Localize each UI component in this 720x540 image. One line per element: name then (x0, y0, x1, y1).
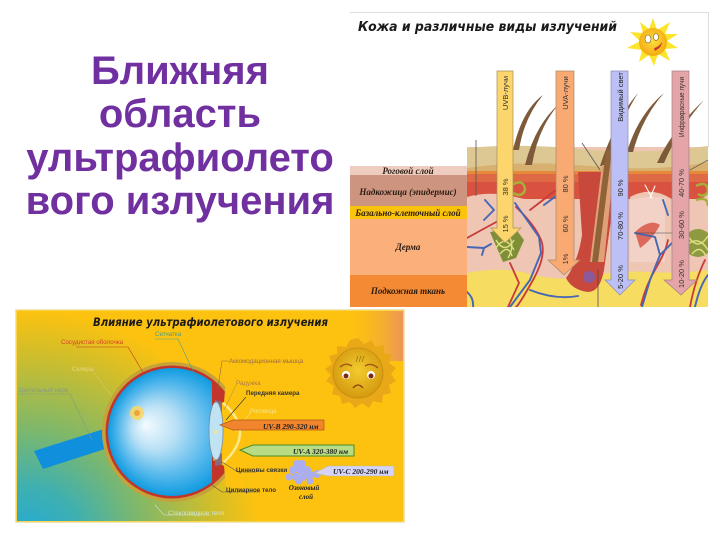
arrow: UVA rays: 1% (561, 253, 570, 264)
arrow: visible light: 70-80 % (616, 212, 625, 240)
macula spot (130, 406, 144, 420)
arrow: UV-A: UV-A 320-380 нм (293, 447, 348, 456)
eye part labels: Роговица (250, 408, 277, 415)
title: вого излучения (26, 179, 334, 223)
optic nerve (34, 428, 108, 469)
arrow: UV-B (220, 420, 324, 431)
layer: basal cells (350, 206, 467, 219)
arrow: UV-A (240, 445, 354, 456)
eye part labels: Зрительный нерв (18, 387, 69, 394)
eye part labels: Сосудистая оболочка (61, 339, 124, 346)
arrow: visible light: 90 % (616, 179, 625, 197)
arrow: UVB rays: 15 % (501, 215, 510, 233)
ozone molecules (286, 460, 321, 484)
layer: subcutaneous tissue (350, 275, 467, 307)
arrow: infrared rays: 40-70 % (677, 169, 686, 197)
arrow: infrared rays: 30-60 % (677, 211, 686, 239)
layer: dermis (350, 219, 467, 275)
title: Ближняя (91, 49, 269, 93)
title: ультрафиолето (26, 136, 334, 180)
sweat glands (490, 182, 712, 262)
arrow: visible light (605, 71, 635, 295)
layer: dermis: Дерма (395, 242, 421, 252)
eye part labels: Передняя камера (246, 390, 300, 397)
arrow: UVA rays: 60 % (561, 215, 570, 233)
eye part labels: Радужка (236, 380, 261, 387)
layer: stratum corneum: Роговой слой (382, 166, 434, 176)
layer: epidermis (350, 175, 467, 206)
icon: worried sun (325, 338, 396, 408)
panel: ultraviolet effect on the eye (15, 309, 405, 523)
anterior segment cut (213, 375, 245, 490)
title: область (99, 92, 261, 136)
arrow: UV-B: UV-B 290-320 нм (263, 422, 319, 431)
arrow: UVA rays: 80 % (561, 175, 570, 193)
skin tissue illustration (467, 93, 712, 307)
arrow: infrared rays: 10-20 % (677, 260, 686, 288)
heading: skin diagram: Кожа и различные виды излучений (358, 19, 617, 35)
arrow: infrared rays: Инфракрасные лучи (677, 77, 686, 137)
hair follicle (566, 150, 614, 292)
eye part labels: Аккомодационная мышца (229, 358, 304, 365)
eye part labels: Цинновы связки (236, 467, 287, 474)
arrow: UVB rays: 38 % (501, 178, 510, 196)
arrow: UVA rays: UVA-лучи (561, 76, 570, 110)
eye part labels: Сетчатка (155, 331, 182, 338)
icon: eyeball (34, 362, 245, 502)
panel: skin and radiation diagram (350, 12, 712, 307)
arrow: UVB rays: UVB-лучи (501, 76, 510, 110)
label lines (17, 339, 260, 515)
arrow: visible light: 5-20 % (616, 265, 625, 289)
layer: epidermis: Надкожица (эпидермис) (358, 187, 457, 197)
arrow: UVA rays (548, 71, 580, 275)
layer labels column (350, 166, 467, 307)
title (26, 49, 334, 223)
blood vessels (467, 160, 708, 307)
eye part labels: Стекловидное тело (168, 510, 225, 517)
lens (209, 402, 223, 460)
arrow: UV-C and ozone layer: UV-C 200-290 нм (333, 467, 389, 476)
arrow: UVB rays (491, 71, 521, 243)
hairs (513, 93, 704, 166)
heading: eye diagram: Влияние ультрафиолетового излучения (93, 315, 329, 329)
eye part labels: Цилиарное тело (226, 487, 276, 494)
layer: stratum corneum (350, 166, 467, 176)
eye part labels: Склера (72, 366, 94, 373)
layer: subcutaneous tissue: Подкожная ткань (370, 286, 445, 296)
arrow: UV-C and ozone layer: слой (299, 493, 313, 501)
layer: basal cells: Базально-клеточный слой (354, 208, 461, 218)
arrow: visible light: Видимый свет (616, 72, 625, 122)
icon: smiling sun (627, 18, 678, 66)
arrow: infrared rays (664, 71, 697, 295)
eye part labels (17, 331, 304, 517)
ozone label: Озоновый (289, 484, 319, 492)
arrow: UV-C and ozone layer (286, 460, 394, 501)
